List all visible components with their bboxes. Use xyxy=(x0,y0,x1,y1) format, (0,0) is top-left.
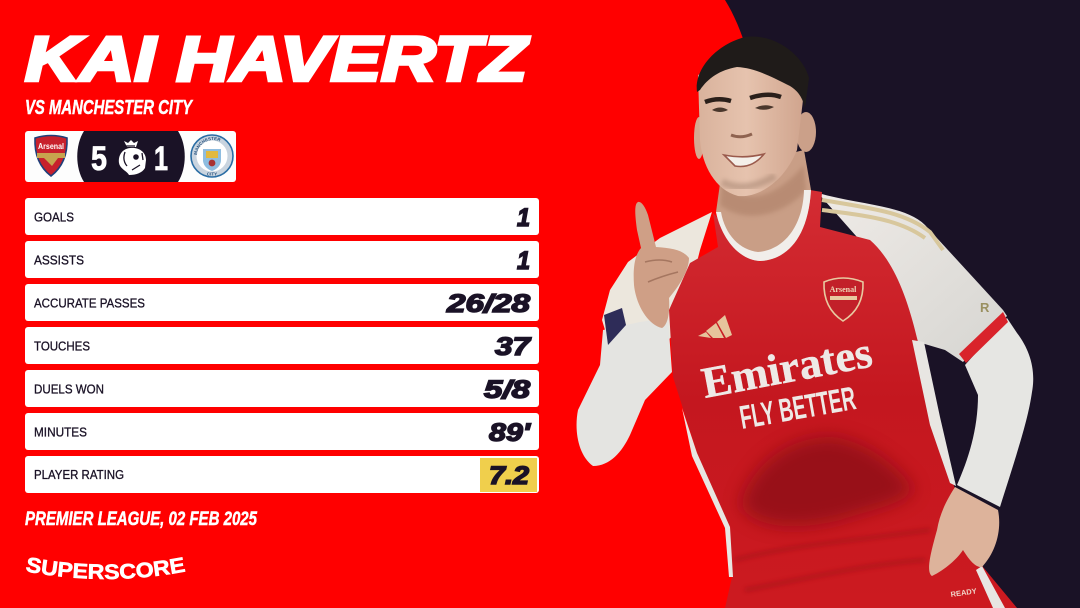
mouth xyxy=(724,154,764,166)
title: KAI HAVERTZ xyxy=(25,24,530,94)
torso xyxy=(669,190,1017,608)
brand logo: SUPERSCORE xyxy=(26,557,186,580)
row: assists xyxy=(25,241,539,278)
row: goals xyxy=(25,198,539,235)
finger lines xyxy=(645,260,678,282)
row: assists: 1 xyxy=(517,247,530,275)
far arm sleeve xyxy=(957,318,1033,507)
row: goals: 1 xyxy=(517,204,530,232)
nose xyxy=(731,134,752,137)
stubble xyxy=(722,176,775,187)
row: minutes xyxy=(25,413,539,450)
hair xyxy=(697,37,809,108)
row: touches: TOUCHES xyxy=(34,340,90,354)
club crest on shirt: Arsenal xyxy=(830,285,857,294)
subtitle: opponent: VS MANCHESTER CITY xyxy=(25,96,194,119)
row: touches xyxy=(25,327,539,364)
shirt creases xyxy=(735,530,930,590)
row: touches: 37 xyxy=(495,333,531,361)
scoreboard xyxy=(25,131,236,182)
background: dark curved panel xyxy=(725,0,1080,608)
row: player rating: PLAYER RATING xyxy=(34,468,124,482)
player xyxy=(577,37,1033,608)
sleeve cuff xyxy=(959,312,1008,363)
club crest on shirt xyxy=(824,278,863,321)
side stripe right lower xyxy=(976,566,1005,608)
row: minutes: MINUTES xyxy=(34,426,87,440)
sponsor text: Emirates xyxy=(698,328,876,408)
row: accurate passes: 26/28 xyxy=(446,290,530,318)
row: assists: ASSISTS xyxy=(34,254,84,268)
score: home goals: 5 xyxy=(91,140,107,178)
icon: Premier League lion xyxy=(119,140,146,175)
row: accurate passes xyxy=(25,284,539,321)
row: duels won xyxy=(25,370,539,407)
row: minutes: 89' xyxy=(489,419,531,447)
side stripe left xyxy=(682,408,733,577)
shorts label: READY xyxy=(950,586,977,599)
gold shoulder stripes xyxy=(822,200,943,250)
icon: Arsenal crest: Arsenal xyxy=(38,142,64,151)
sponsor tagline: FLY BETTER xyxy=(737,379,859,436)
forearm sleeve xyxy=(577,318,672,466)
head xyxy=(694,37,816,196)
sleeve badge xyxy=(604,308,626,345)
left ear xyxy=(694,117,704,159)
row: accurate passes: ACCURATE PASSES xyxy=(34,296,145,310)
sleeve patch: R xyxy=(980,300,990,315)
icon: Arsenal crest xyxy=(35,136,67,176)
match info: PREMIER LEAGUE, 02 FEB 2025 xyxy=(25,508,258,530)
row: duels won: 5/8 xyxy=(484,376,530,404)
shirt sleeve xyxy=(818,193,1007,362)
eyes xyxy=(712,105,774,112)
score: away goals: 1 xyxy=(154,140,168,178)
icon: Manchester City crest: MANCHESTER xyxy=(194,136,220,155)
row: player rating: 7.2 xyxy=(489,462,529,490)
icon: Manchester City crest: CITY xyxy=(207,172,217,176)
hand on hip xyxy=(929,487,999,576)
sweat patch xyxy=(740,437,915,526)
row: goals: GOALS xyxy=(34,210,74,224)
face xyxy=(698,62,806,196)
score panel background xyxy=(25,131,236,182)
side stripe right xyxy=(912,340,956,486)
collar xyxy=(716,190,811,261)
hand pointing xyxy=(634,202,689,328)
neck shadow xyxy=(720,165,806,216)
score centre pill xyxy=(77,131,185,182)
adidas logo xyxy=(698,315,732,338)
brows xyxy=(705,95,781,102)
icon: Manchester City crest xyxy=(190,134,234,178)
right ear xyxy=(796,112,816,152)
stats table xyxy=(25,198,539,493)
left shoulder xyxy=(602,212,712,380)
row: duels won: DUELS WON xyxy=(34,382,104,396)
row: player rating xyxy=(25,456,539,493)
neck xyxy=(716,150,811,261)
